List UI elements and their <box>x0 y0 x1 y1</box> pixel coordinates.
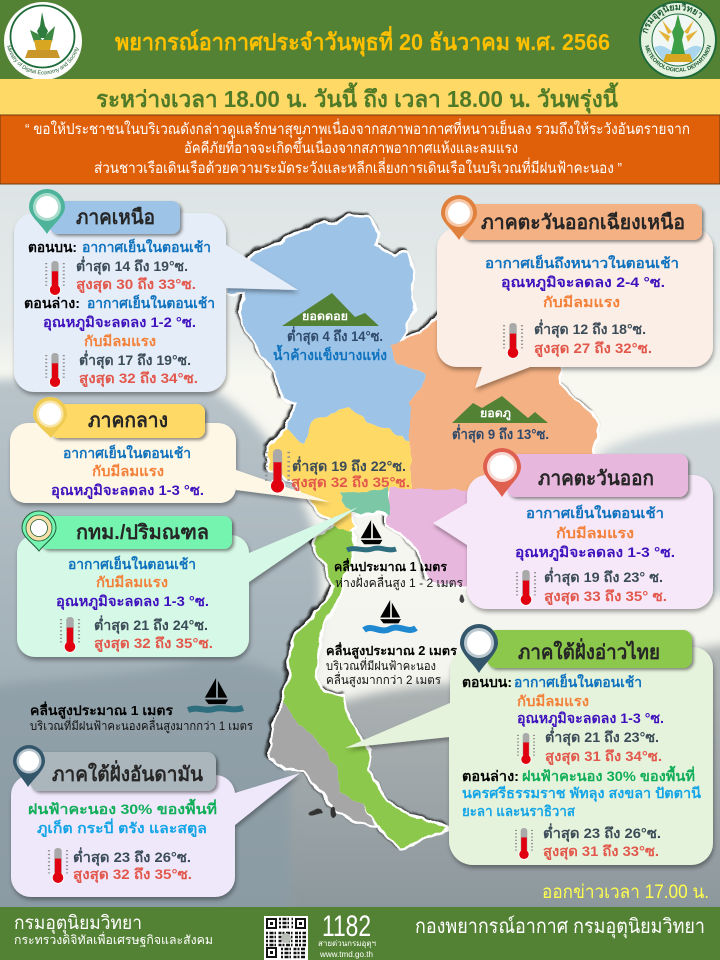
header: east <box>507 454 688 497</box>
header: Andaman: ภาคใต้ฝั่งอันดามัน <box>52 759 203 786</box>
footer band: สายด่วนกรมอุตุฯ <box>318 939 376 948</box>
forecast text: กับมีลมแรง <box>556 525 634 541</box>
icon: map pin <box>29 189 65 234</box>
forecast text <box>24 238 215 387</box>
icon: boat <box>361 520 382 544</box>
forecast text: สูงสุด 32 ถึง 35°ซ. <box>73 866 192 883</box>
forecast text: สูงสุด 30 ถึง 33°ซ. <box>76 276 196 293</box>
icon: boat <box>205 678 228 704</box>
forecast text: สูงสุด 32 ถึง 34°ซ. <box>79 370 198 387</box>
map of Thailand by region <box>227 217 598 850</box>
wave note: lower gulf: คลื่นสูงมากกว่า 2 เมตร <box>326 671 442 688</box>
icon: mountain <box>452 396 548 423</box>
callout bubble <box>345 647 713 865</box>
forecast text <box>51 444 204 499</box>
icon: boat <box>380 600 401 623</box>
header: Bangkok <box>40 516 232 549</box>
subtitle band: ระหว่างเวลา 18.00 น. วันนี้ ถึง เวลา 18.00 น. วันพรุ่งนี้ <box>96 82 619 114</box>
header: Gulf: ภาคใต้ฝั่งอ่าวไทย <box>518 637 660 664</box>
forecast text: ตอนบน: <box>462 674 512 690</box>
forecast text: อุณหภูมิจะลดลง 1-2 °ซ. <box>43 314 196 331</box>
forecast text <box>28 798 217 883</box>
wave note: lower gulf: คลื่นสูงประมาณ 2 เมตร <box>326 642 457 659</box>
forecast text: ต่ำสุด 23 ถึง 26°ซ. <box>73 847 191 866</box>
header: north: ภาคเหนือ <box>76 206 155 229</box>
panel: northeast <box>437 195 713 388</box>
forecast text: อุณหภูมิจะลดลง 1-3 °ซ. <box>51 482 204 499</box>
footer band: กรมอุตุนิยมวิทยา <box>14 913 142 935</box>
footer band: กระทรวงดิจิทัลเพื่อเศรษฐกิจและสังคม <box>14 931 213 947</box>
forecast text: ฝนฟ้าคะนอง 30% ของพื้นที่ <box>28 798 217 817</box>
forecast text: กับมีลมแรง <box>84 333 156 349</box>
icon: thermometer <box>266 449 289 494</box>
header: northeast <box>462 204 702 240</box>
north peak callout: น้ำค้างแข็งบางแห่ง <box>273 344 387 363</box>
background: misty mountains <box>0 184 720 940</box>
forecast text: ยะลา และนราธิวาส <box>462 803 575 819</box>
subtitle band <box>0 79 720 115</box>
north peak callout: ต่ำสุด 4 ถึง 14°ซ. <box>287 326 383 345</box>
header band <box>0 0 720 79</box>
icon: map pin <box>460 624 498 673</box>
icon: thermometer <box>518 733 534 765</box>
warning band <box>0 115 720 184</box>
title: พยากรณ์อากาศประจำวันพุธที่ 20 ธันวาคม พ.ศ. 2566 <box>115 25 610 57</box>
forecast text: อากาศเย็นถึงหนาวในตอนเช้า <box>485 254 679 271</box>
forecast text: กับมีลมแรง <box>543 294 620 310</box>
callout bubble <box>10 423 330 503</box>
forecast text: นครศรีธรรมราช พัทลุง สงขลา ปัตตานี <box>462 785 701 802</box>
callout bubble <box>14 213 298 392</box>
panel: south Gulf of Thailand coast <box>345 624 713 865</box>
forecast text: อากาศเย็นในตอนเช้า <box>514 673 642 690</box>
header: Andaman <box>30 752 216 791</box>
forecast text: อุณหภูมิจะลดลง 1-3 °ซ. <box>517 710 664 727</box>
forecast text: ต่ำสุด 14 ถึง 19°ซ. <box>76 256 188 275</box>
header: Bangkok: กทม./ปริมณฑล <box>76 522 209 544</box>
forecast text: ฝนฟ้าคะนอง 30% ของพื้นที่ <box>522 765 695 784</box>
forecast text: ต่ำสุด 17 ถึง 19°ซ. <box>79 350 191 369</box>
icon: mountain <box>282 293 379 326</box>
forecast text <box>485 254 679 357</box>
footer band: 1182 <box>322 910 371 943</box>
wave note: lower gulf <box>326 600 457 688</box>
header: central <box>50 404 205 438</box>
header: north <box>50 201 180 234</box>
northeast peak callout: ยอดภู <box>480 408 511 421</box>
wave note: Andaman sea: คลื่นสูงประมาณ 1 เมตร <box>30 701 173 719</box>
logo: Meteorological Department: กรมอุตุนิยมวิทยา <box>642 3 702 34</box>
icon: thermometer <box>49 848 67 884</box>
icon: waves <box>188 708 243 710</box>
wave note: upper gulf: คลื่นประมาณ 1 เมตร <box>334 558 447 574</box>
wave note: Andaman sea <box>30 678 254 734</box>
central temperatures on map: สูงสุด 32 ถึง 35°ซ. <box>291 474 410 491</box>
callout bubble <box>11 773 300 897</box>
callout bubble <box>17 507 358 657</box>
forecast text: ต่ำสุด 23 ถึง 26°ซ. <box>543 823 661 842</box>
forecast text: อากาศเย็นในตอนเช้า <box>68 555 196 572</box>
QR code <box>264 916 308 960</box>
logo: Ministry of Digital Economy and Society <box>4 2 82 79</box>
forecast text: สูงสุด 27 ถึง 32°ซ. <box>534 340 652 357</box>
forecast text: อากาศเย็นในตอนเช้า <box>63 444 191 461</box>
panel: central <box>10 397 330 503</box>
header: central: ภาคกลาง <box>88 410 168 432</box>
panel: east <box>433 448 713 609</box>
icon: map pin <box>13 745 45 787</box>
forecast text: ต่ำสุด 19 ถึง 23° ซ. <box>544 567 663 586</box>
forecast text: สูงสุด 32 ถึง 35°ซ. <box>94 635 213 652</box>
forecast text: อากาศเย็นในตอนเช้า <box>87 294 215 311</box>
icon: thermometer <box>517 570 535 606</box>
footer band <box>0 907 720 960</box>
forecast text: ตอนล่าง: <box>462 768 519 784</box>
logo: Ministry of Digital Economy and Society: Ministry of Digital Economy and Society <box>7 45 79 74</box>
icon: thermometer <box>46 353 64 388</box>
icon: waves <box>347 548 396 550</box>
forecast text: ต่ำสุด 21 ถึง 23°ซ. <box>545 727 659 746</box>
north peak callout: ยอดดอย <box>302 311 348 323</box>
panel: Bangkok and vicinity <box>17 507 358 657</box>
forecast text: อุณหภูมิจะลดลง 2-4 °ซ. <box>501 274 665 291</box>
icon: thermometer <box>516 828 532 860</box>
forecast text: ต่ำสุด 21 ถึง 24°ซ. <box>94 615 208 634</box>
warning band: ส่วนชาวเรือเดินเรือด้วยความระมัดระวังและหลีกเลี่ยงการเดินเรือในบริเวณที่มีฝนฟ้าคะนอง ” <box>94 157 622 177</box>
forecast text: อุณหภูมิจะลดลง 1-3 °ซ. <box>515 544 675 561</box>
forecast text: อุณหภูมิจะลดลง 1-3 °ซ. <box>56 593 209 610</box>
forecast text: ตอนบน: <box>28 239 77 255</box>
callout bubble <box>437 228 713 388</box>
icon: map pin <box>483 448 521 497</box>
forecast text: อากาศเย็นในตอนเช้า <box>526 504 664 521</box>
forecast text: ตอนล่าง: <box>24 295 80 311</box>
callout bubble <box>433 475 713 609</box>
icon: map pin <box>441 195 477 240</box>
logo: Meteorological Department <box>639 1 717 79</box>
footer band: www.tmd.go.th <box>319 950 373 959</box>
forecast text: อากาศเย็นในตอนเช้า <box>82 238 211 255</box>
icon: thermometer <box>61 617 79 653</box>
warning band: อัคคีภัยที่อาจจะเกิดขึ้นเนื่องจากสภาพอากาศแห้งและลมแรง <box>184 137 518 157</box>
icon: map pin <box>22 511 56 551</box>
forecast text: สูงสุด 33 ถึง 35° ซ. <box>544 588 667 605</box>
header: Gulf <box>487 630 692 668</box>
forecast text: ภูเก็ต กระบี่ ตรัง และสตูล <box>37 818 207 837</box>
icon: thermometer <box>504 323 522 359</box>
forecast text: สูงสุด 31 ถึง 33°ซ. <box>543 843 659 860</box>
forecast text: ต่ำสุด 12 ถึง 18°ซ. <box>534 319 646 338</box>
forecast text <box>462 673 701 860</box>
panel: north <box>14 189 298 392</box>
northeast peak callout <box>452 396 549 443</box>
header: northeast: ภาคตะวันออกเฉียงเหนือ <box>481 211 685 234</box>
wave note: upper gulf: ห่างฝั่งคลื่นสูง 1 - 2 เมตร <box>335 574 464 591</box>
icon: thermometer <box>46 261 64 296</box>
forecast text <box>515 504 675 605</box>
panel: south Andaman coast <box>11 745 300 897</box>
icon: map pin <box>33 397 67 438</box>
wave note: upper gulf <box>334 520 464 591</box>
forecast text: กับมีลมแรง <box>517 693 589 709</box>
forecast text <box>56 555 213 652</box>
central temperatures on map <box>266 449 410 494</box>
wave note: Andaman sea: บริเวณที่มีฝนฟ้าคะนองคลื่นสูงมากกว่า 1 เมตร <box>30 717 254 734</box>
north peak callout <box>273 293 387 363</box>
forecast text: สูงสุด 31 ถึง 34°ซ. <box>545 748 662 765</box>
header: east: ภาคตะวันออก <box>538 468 654 490</box>
forecast text: กับมีลมแรง <box>92 463 164 479</box>
northeast peak callout: ต่ำสุด 9 ถึง 13°ซ. <box>452 424 549 443</box>
forecast text: กับมีลมแรง <box>96 574 168 590</box>
central temperatures on map: ต่ำสุด 19 ถึง 22°ซ. <box>292 456 406 475</box>
icon: waves <box>364 628 416 630</box>
wave note: lower gulf: บริเวณที่มีฝนฟ้าคะนอง <box>326 657 436 673</box>
